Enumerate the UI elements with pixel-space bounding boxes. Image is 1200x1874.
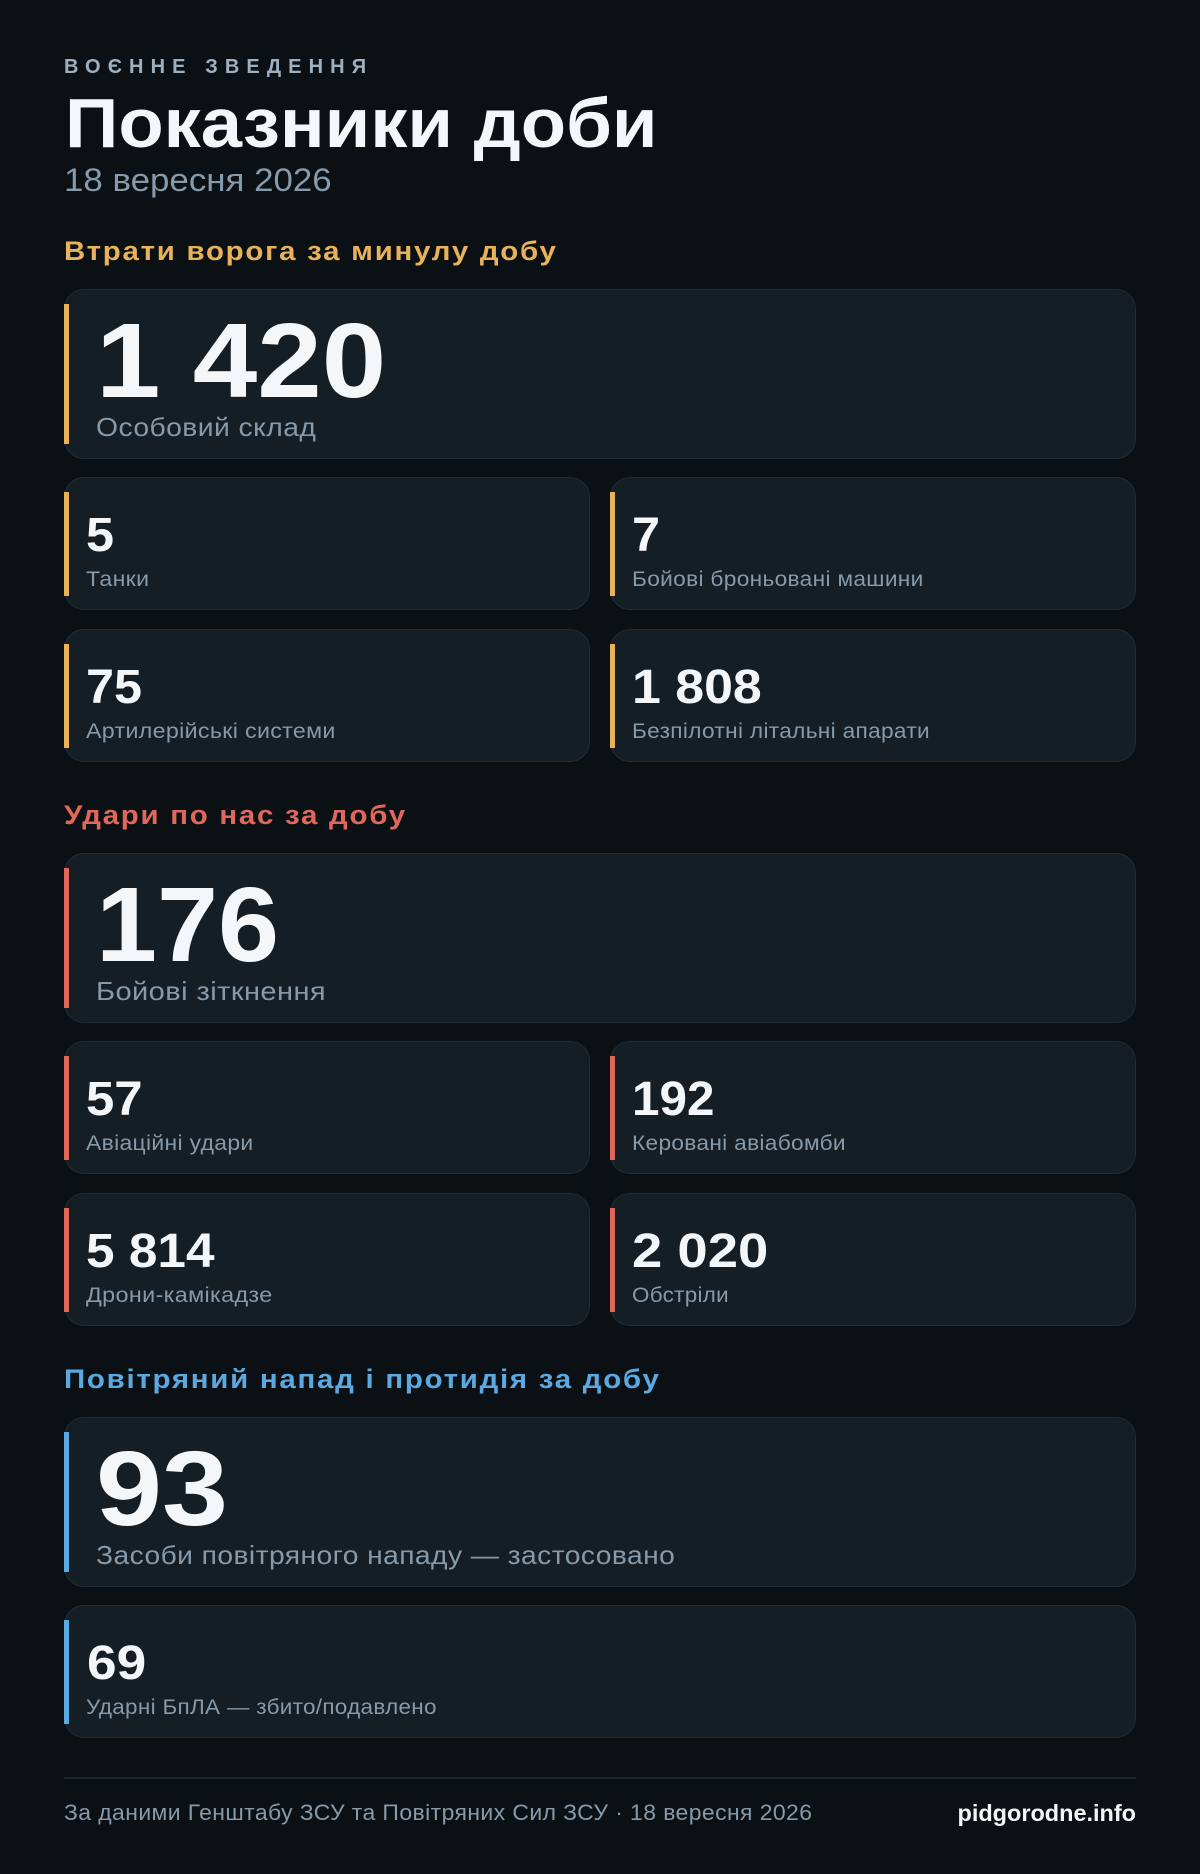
card: strike UAVs xyxy=(64,1605,1136,1738)
card: artillery: 75 xyxy=(86,661,142,714)
accent: guided bombs xyxy=(610,1056,615,1160)
card: air strikes xyxy=(64,1041,590,1174)
card: strike UAVs: Ударні БпЛА — збито/подавлено xyxy=(86,1696,437,1719)
card: kamikaze drones: 5 814 xyxy=(86,1225,215,1278)
heading: air attack: Повітряний напад і протидія за добу xyxy=(64,1364,661,1394)
card: drones: 1 808 xyxy=(632,661,762,714)
card: artillery: Артилерійські системи xyxy=(86,720,336,743)
card: strike UAVs: 69 xyxy=(87,1637,146,1690)
card: drones: Безпілотні літальні апарати xyxy=(632,720,930,743)
card: artillery xyxy=(64,629,590,762)
card: guided bombs: Керовані авіабомби xyxy=(632,1132,846,1155)
accent: kamikaze drones xyxy=(64,1208,69,1312)
accent: air strikes xyxy=(64,1056,69,1160)
card: personnel: Особовий склад xyxy=(96,412,316,442)
card: armored vehicles: Бойові броньовані машини xyxy=(632,568,924,591)
card: drones xyxy=(610,629,1136,762)
accent: strike UAVs xyxy=(64,1620,69,1724)
card: tanks xyxy=(64,477,590,610)
card: armored vehicles xyxy=(610,477,1136,610)
card: air attack means: Засоби повітряного нападу — застосовано xyxy=(96,1540,675,1570)
heading: enemy losses: Втрати ворога за минулу добу xyxy=(64,236,558,266)
card: air strikes: Авіаційні удари xyxy=(86,1132,254,1155)
card: air attack means: 93 xyxy=(96,1430,228,1548)
card: air attack means xyxy=(64,1417,1136,1587)
title: Показники доби xyxy=(65,84,658,162)
card: clashes: 176 xyxy=(96,866,279,984)
card: personnel xyxy=(64,289,1136,459)
accent: personnel xyxy=(64,304,69,444)
card: armored vehicles: 7 xyxy=(632,509,660,562)
card: kamikaze drones: Дрони-камікадзе xyxy=(86,1284,273,1307)
card: shelling: 2 020 xyxy=(632,1225,768,1278)
heading: strikes: Удари по нас за добу xyxy=(64,800,407,830)
card: clashes xyxy=(64,853,1136,1023)
accent: tanks xyxy=(64,492,69,596)
accent: drones xyxy=(610,644,615,748)
footer source: За даними Генштабу ЗСУ та Повітряних Сил ЗСУ · 18 вересня 2026 xyxy=(64,1800,812,1825)
card: shelling xyxy=(610,1193,1136,1326)
accent: armored vehicles xyxy=(610,492,615,596)
date: 18 вересня 2026 xyxy=(64,162,332,198)
accent: clashes xyxy=(64,868,69,1008)
card: tanks: Танки xyxy=(86,568,149,591)
card: shelling: Обстріли xyxy=(632,1284,729,1307)
accent: shelling xyxy=(610,1208,615,1312)
eyebrow: ВОЄННЕ ЗВЕДЕННЯ xyxy=(64,56,373,78)
card: personnel: 1 420 xyxy=(96,302,386,420)
accent: artillery xyxy=(64,644,69,748)
card: guided bombs xyxy=(610,1041,1136,1174)
card: clashes: Бойові зіткнення xyxy=(96,976,326,1006)
card: kamikaze drones xyxy=(64,1193,590,1326)
card: tanks: 5 xyxy=(86,509,114,562)
card: air strikes: 57 xyxy=(86,1073,143,1126)
accent: air attack means xyxy=(64,1432,69,1572)
card: guided bombs: 192 xyxy=(632,1073,714,1126)
footer brand: pidgorodne.info xyxy=(957,1800,1136,1826)
